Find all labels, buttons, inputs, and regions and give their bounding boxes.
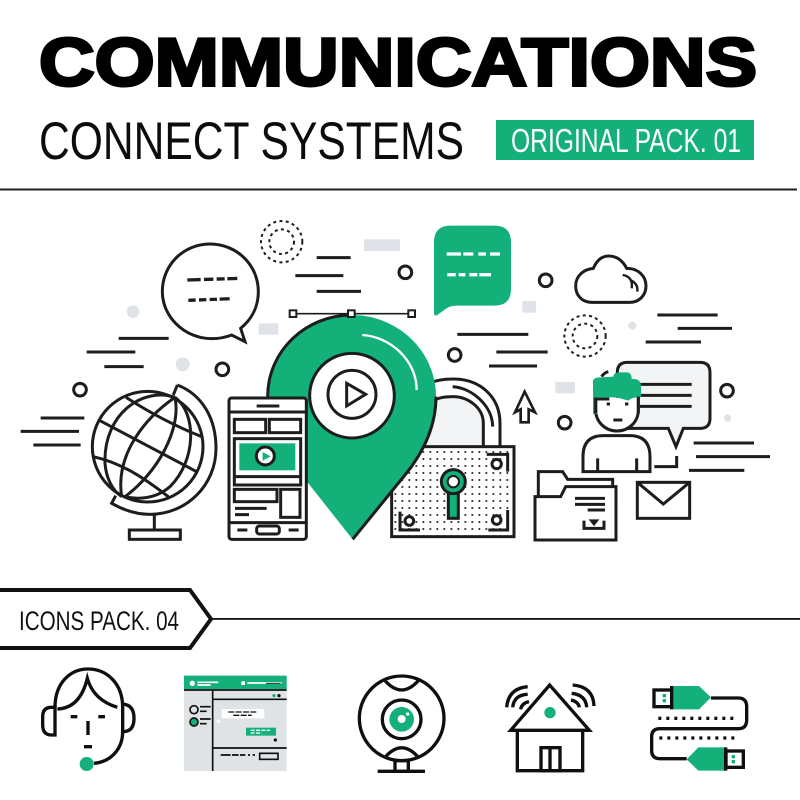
icon: envelope: [637, 482, 690, 518]
icon: smart home: [507, 685, 594, 771]
section tag: icons pack: [0, 590, 211, 648]
icon: support agent: [43, 669, 134, 771]
icon: chat bubble: [617, 362, 710, 447]
icon: usb cable: [652, 686, 747, 771]
icon: globe: [92, 385, 216, 539]
dashed circles: [261, 221, 606, 357]
icon: smartphone: [229, 398, 306, 539]
icon: folder: [535, 472, 616, 540]
bottom icon row: [43, 669, 287, 771]
title: COMMUNICATIONS: [39, 24, 757, 100]
decorative small circles and dots: [74, 239, 733, 429]
icon: green speech bubble: [434, 226, 511, 316]
speed lines: [21, 258, 770, 470]
icon: person: [583, 372, 677, 472]
icons: smart home and usb cable: [507, 685, 747, 771]
icon: chat window: [184, 676, 287, 771]
section tag: icons pack: ICONS PACK. 04: [19, 606, 179, 636]
icon: webcam: [359, 676, 444, 771]
icon: padlock: [392, 379, 514, 537]
subtitle: CONNECT SYSTEMS: [39, 112, 464, 171]
bezier control handles: [290, 310, 415, 317]
icon: speech bubble: [162, 244, 258, 342]
icon: up arrow: [515, 392, 535, 422]
icon: cloud: [576, 256, 646, 302]
icon: location pin: [268, 315, 436, 539]
main illustration: [21, 221, 770, 540]
